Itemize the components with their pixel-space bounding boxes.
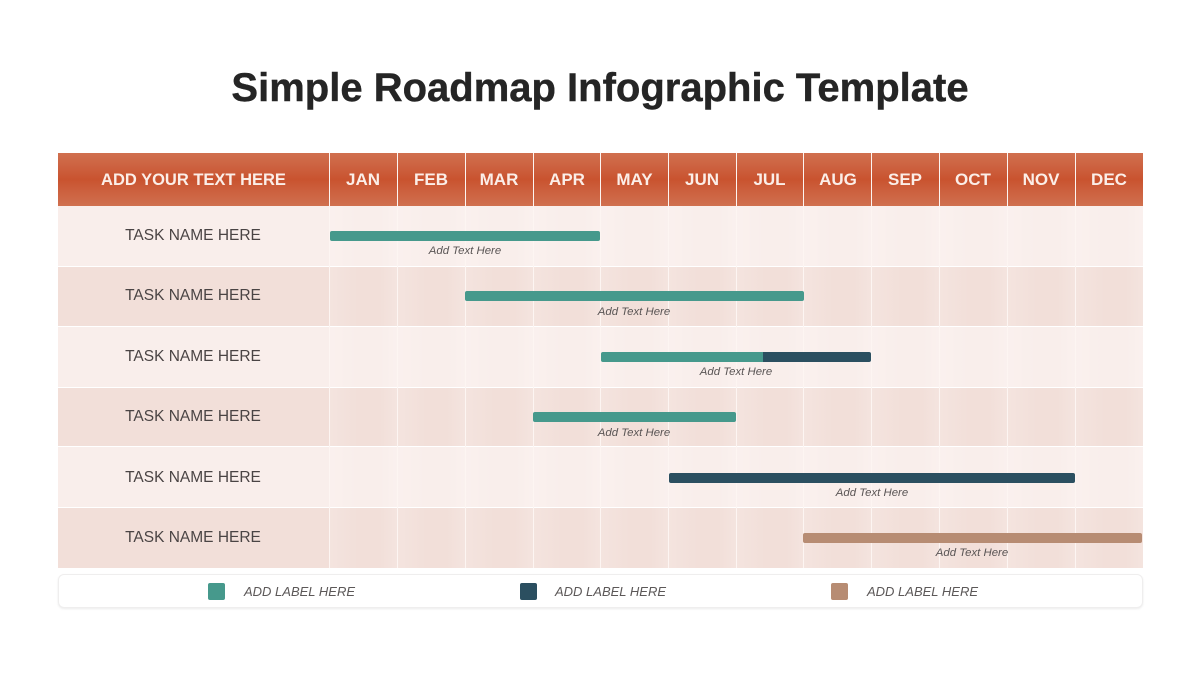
note: row 2: Add Text Here [598,306,670,318]
note: row 6: Add Text Here [936,547,1008,559]
header: DEC: DEC [1091,170,1127,189]
note: row 5: Add Text Here [836,487,908,499]
header: JAN: JAN [346,170,380,189]
note: row 4: Add Text Here [598,427,670,439]
header: MAR: MAR [480,170,518,189]
row 2 background and task name: TASK NAME HERE [125,286,261,304]
legend swatch: navy [520,583,537,600]
bar: row 5 navy [669,473,1075,483]
row 6 background and task name [58,508,1143,568]
note: row 1: Add Text Here [429,245,501,257]
row 4 background and task name: TASK NAME HERE [125,408,261,425]
row 1 background and task name [58,206,1143,266]
note: row 3: Add Text Here [700,366,772,378]
row 1 background and task name: TASK NAME HERE [125,227,261,244]
bar: row 2 teal [465,291,804,301]
bar: row 3 teal and navy [601,352,871,362]
row 5 background and task name: TASK NAME HERE [125,469,261,486]
bar: row 1 teal [330,231,600,241]
row 3 background and task name [58,327,1143,387]
header: MAY: MAY [616,170,653,189]
header: SEP: SEP [888,170,922,189]
row 3 background and task name: TASK NAME HERE [125,348,261,365]
header: FEB: FEB [414,170,448,189]
legend label: navy: ADD LABEL HERE [555,584,666,599]
header: AUG: AUG [819,170,857,189]
header: JUN: JUN [685,170,719,189]
legend label: teal: ADD LABEL HERE [244,584,355,599]
header: OCT: OCT [955,170,991,189]
legend swatch: tan [831,583,848,600]
header: NOV: NOV [1023,170,1059,189]
row 5 background and task name [58,447,1143,507]
header: APR: APR [549,170,585,189]
legend panel [58,574,1143,608]
row 2 background and task name [58,267,1143,326]
row 4 background and task name [58,388,1143,446]
row 6 background and task name: TASK NAME HERE [125,529,261,546]
bar: row 6 tan [803,533,1142,543]
title: Simple Roadmap Infographic Template [231,66,969,110]
header row [58,153,1143,206]
header: JUL: JUL [753,170,786,189]
legend label: tan: ADD LABEL HERE [867,584,978,599]
bar: row 4 teal [533,412,736,422]
legend swatch: teal [208,583,225,600]
header: first column: ADD YOUR TEXT HERE [101,171,286,189]
